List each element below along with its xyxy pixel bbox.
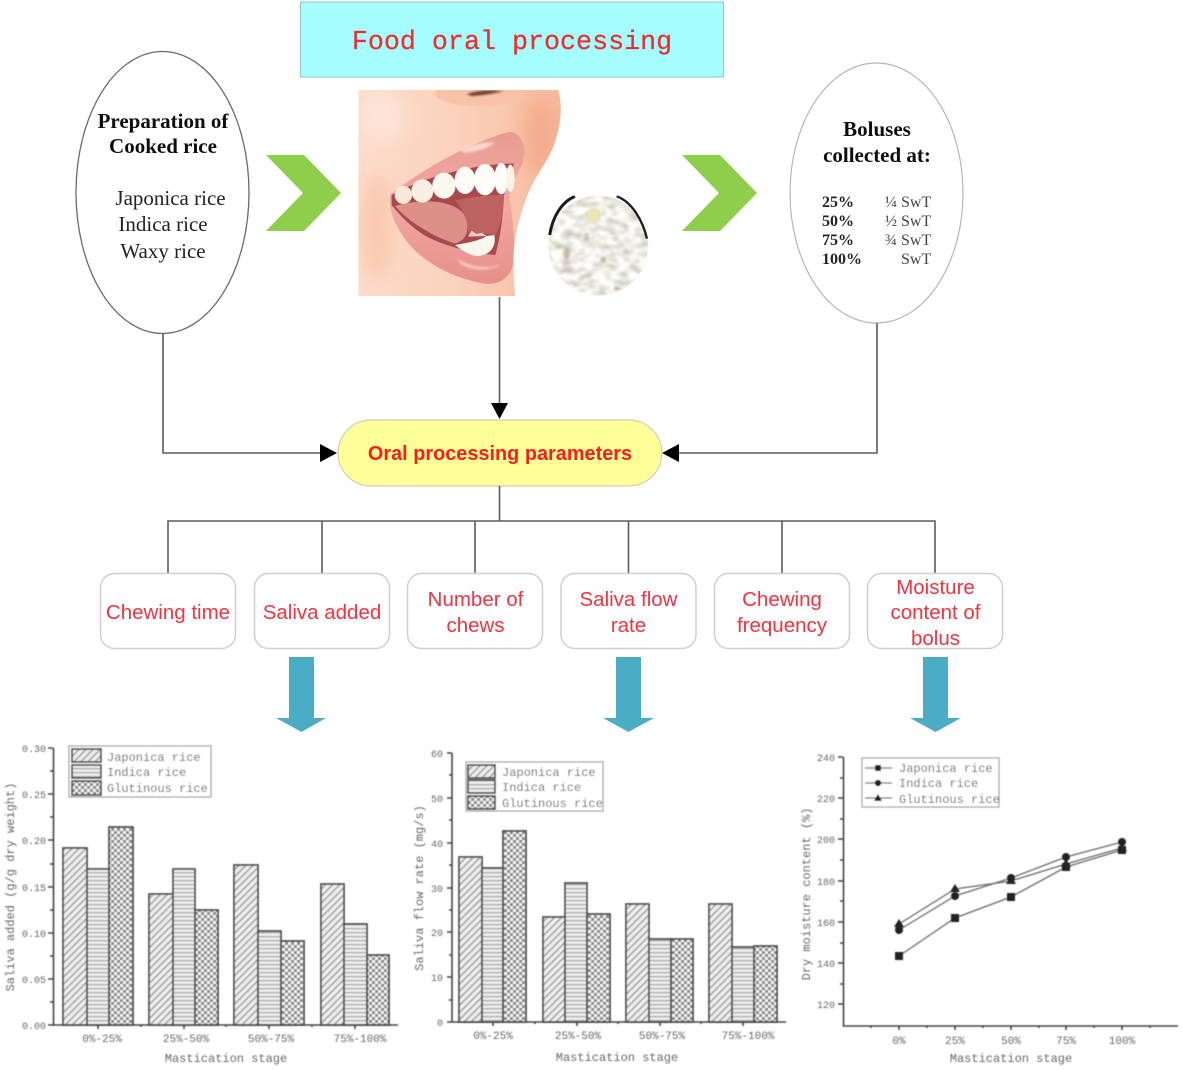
line chart: dry moisture content: 50%: [1001, 1036, 1021, 1048]
panel: boluses collected: 75%: [822, 232, 854, 249]
panel: preparation of cooked rice: Waxy rice: [120, 239, 206, 263]
line chart: dry moisture content: 120: [817, 1001, 835, 1012]
line chart: dry moisture content: 220: [817, 795, 835, 806]
panel: saliva flow rate: rate: [611, 614, 646, 637]
bar chart: saliva flow rate: 40: [431, 840, 443, 851]
legend: saliva added: Japonica rice: [107, 751, 201, 765]
line chart: dry moisture content: 0%: [892, 1036, 906, 1048]
panel: preparation of cooked rice: [76, 52, 249, 334]
panel: number of chews: chews: [446, 614, 505, 637]
bar chart: saliva flow rate: Saliva flow rate (mg/s): [413, 805, 427, 971]
panel: saliva flow rate: [561, 574, 696, 648]
panel: boluses collected: ¼ SwT: [885, 194, 931, 211]
arrow: saliva flow rate down: [603, 657, 654, 732]
bar chart: saliva added: 0.10: [22, 930, 46, 941]
panel: chewing frequency: [714, 574, 850, 648]
panel: chewing frequency: frequency: [737, 614, 828, 637]
legend: dry moisture content: Glutinous rice: [899, 793, 1000, 807]
bar chart: saliva added: 25%-50%: [163, 1034, 209, 1046]
panel: moisture content of bolus: [868, 574, 1002, 650]
panel: number of chews: [408, 574, 542, 648]
panel: boluses collected: 25%: [822, 194, 854, 211]
panel: saliva added: Saliva added: [263, 601, 381, 624]
bar chart: saliva flow rate: 25%-50%: [555, 1031, 601, 1043]
arrow: saliva added down: [276, 657, 326, 732]
bar chart: saliva added: [4, 745, 398, 1066]
bar chart: saliva added: 50%-75%: [248, 1034, 294, 1046]
panel: boluses collected: collected at:: [823, 143, 931, 167]
line chart: dry moisture content: 100%: [1109, 1036, 1136, 1048]
bar chart: saliva added: Mastication stage: [165, 1052, 287, 1066]
title: [300, 2, 724, 77]
bar chart: saliva added: 0%-25%: [82, 1034, 122, 1046]
bar chart: saliva flow rate: 75%-100%: [722, 1031, 775, 1043]
legend: dry moisture content: Indica rice: [899, 777, 978, 791]
line chart: dry moisture content: [800, 754, 1178, 1066]
connector tree: [168, 486, 935, 573]
bar chart: saliva added: 75%-100%: [334, 1034, 387, 1046]
legend: saliva added: Indica rice: [107, 766, 186, 780]
panel: chewing frequency: Chewing: [742, 588, 822, 611]
bar chart: saliva flow rate: Mastication stage: [556, 1051, 678, 1065]
line chart: dry moisture content: 240: [817, 754, 835, 765]
icon: green chevron right: [682, 155, 757, 231]
panel: boluses collected: 50%: [822, 213, 854, 230]
bar chart: saliva flow rate: 50: [431, 795, 443, 806]
mouth interior: [392, 163, 514, 255]
legend: saliva flow rate: Glutinous rice: [502, 797, 603, 811]
title: Food oral processing: [352, 28, 672, 58]
line chart: dry moisture content: 75%: [1056, 1036, 1076, 1048]
arrow: mouth to parameters: [491, 297, 508, 419]
bar chart: saliva flow rate: 0: [437, 1019, 443, 1030]
line chart: dry moisture content: 140: [817, 960, 835, 971]
bar chart: saliva flow rate: 60: [431, 750, 443, 761]
legend: saliva flow rate: Indica rice: [502, 781, 581, 795]
bar chart: saliva added: Saliva added (g/g dry weight): [4, 783, 18, 991]
lower teeth: [455, 235, 495, 256]
lip highlights: [460, 142, 495, 153]
arrow: moisture content down: [910, 657, 961, 732]
bar chart: saliva added: 0.00: [22, 1022, 46, 1033]
line chart: dry moisture content: Mastication stage: [950, 1052, 1072, 1066]
bar chart: saliva added: 0.20: [22, 837, 46, 848]
panel: number of chews: Number of: [428, 588, 524, 611]
bar chart: saliva added: 0.05: [22, 976, 46, 987]
legend: dry moisture content: Japonica rice: [899, 762, 993, 776]
line chart: dry moisture content: Dry moisture content (%): [800, 808, 814, 980]
panel: boluses collected: SwT: [901, 251, 931, 268]
icon: mouth photo: [358, 81, 565, 297]
legend: dry moisture content: [862, 758, 1000, 807]
panel: boluses collected: 100%: [822, 251, 862, 268]
panel: saliva flow rate: Saliva flow: [580, 588, 678, 611]
legend: saliva flow rate: [466, 762, 603, 811]
lips whole: [390, 132, 524, 284]
arrow: preparation to parameters: [163, 334, 337, 462]
upper teeth: [395, 186, 412, 204]
bar chart: saliva flow rate: [413, 750, 786, 1065]
bar chart: saliva flow rate: 10: [431, 974, 443, 985]
panel: preparation of cooked rice: Indica rice: [118, 212, 208, 236]
bar chart: saliva flow rate: 0%-25%: [473, 1031, 513, 1043]
panel: preparation of cooked rice: Cooked rice: [109, 134, 217, 158]
line chart: dry moisture content: 180: [817, 878, 835, 889]
legend: saliva flow rate: Japonica rice: [502, 766, 596, 780]
bar chart: saliva added: 0.15: [22, 884, 46, 895]
icon: green chevron left: [266, 155, 341, 231]
arrow: boluses to parameters: [662, 323, 877, 462]
panel: moisture content of bolus: bolus: [911, 627, 960, 650]
legend: saliva added: [69, 746, 211, 797]
bar chart: saliva added: 0.30: [22, 745, 46, 756]
panel: moisture content of bolus: Moisture: [896, 576, 975, 599]
panel: preparation of cooked rice: Japonica rice: [115, 186, 226, 210]
panel: moisture content of bolus: content of: [890, 601, 981, 624]
panel: chewing time: Chewing time: [106, 601, 230, 624]
panel: preparation of cooked rice: Preparation of: [98, 109, 229, 133]
legend: saliva added: Glutinous rice: [107, 782, 208, 796]
icon: rice bolus: [548, 196, 648, 296]
line chart: dry moisture content: 25%: [945, 1036, 965, 1048]
bar chart: saliva flow rate: 20: [431, 929, 443, 940]
panel: boluses collected: ½ SwT: [885, 213, 931, 230]
bar chart: saliva added: 0.25: [22, 791, 46, 802]
panel: oral processing parameters: Oral processing parameters: [368, 443, 632, 465]
panel: boluses collected: Boluses: [843, 117, 911, 141]
line chart: dry moisture content: 200: [817, 836, 835, 847]
panel: boluses collected: [790, 63, 963, 323]
panel: boluses collected: ¾ SwT: [885, 232, 931, 249]
panel: oral processing parameters: [338, 420, 662, 486]
bar chart: saliva flow rate: 30: [431, 885, 443, 896]
bar chart: saliva flow rate: 50%-75%: [639, 1031, 685, 1043]
panel: chewing time: [100, 574, 236, 648]
tongue: [395, 201, 467, 243]
panel: saliva added: [254, 574, 390, 648]
line chart: dry moisture content: 160: [817, 919, 835, 930]
